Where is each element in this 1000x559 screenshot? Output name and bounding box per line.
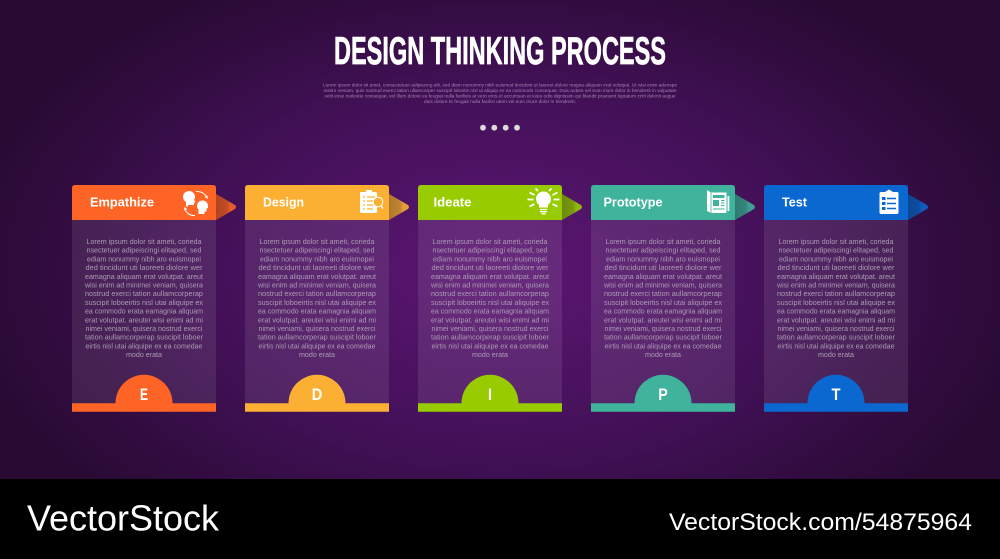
body text: ea commodo erata eamagnia aliquam: [777, 307, 895, 316]
bottom tab with letter: [72, 375, 216, 412]
body text: ediam nonummy nibh aro euismopei: [433, 254, 547, 263]
panel: Test: [764, 185, 928, 412]
body text: erat volutpat. areutei wisi enimi ad mi: [777, 315, 895, 324]
body text: nsectetuer adipeiscingi elitaped, sed: [778, 246, 894, 255]
header label: Design: [263, 196, 304, 210]
body text: ediam nonummy nibh aro euismopei: [606, 254, 720, 263]
card body: [591, 220, 735, 404]
body text: eamagna aliquam erat volutpat. areut: [258, 272, 377, 281]
body text: wisi enim ad minimei veniam, quisera: [603, 280, 723, 290]
body text: nostrud exerci tation aullamcorperap: [431, 289, 549, 298]
bottom tab with letter: E: [140, 385, 148, 404]
body text: nsectetuer adipeiscingi elitaped, sed: [86, 246, 202, 255]
body text: tation aullamcorperap suscipit loboer: [258, 333, 376, 342]
body text: ediam nonummy nibh aro euismopei: [260, 254, 374, 263]
body text: eirtis nisl utai aliquipe ex ea comedae: [86, 341, 202, 350]
card body: [418, 220, 562, 404]
header label: Prototype: [604, 196, 663, 210]
body text: Lorem ipsum dolor sit ameti, corieda: [778, 237, 894, 246]
body text: eamagna aliquam erat volutpat. areut: [431, 272, 550, 281]
arrow: [735, 194, 755, 220]
body text: nsectetuer adipeiscingi elitaped, sed: [432, 246, 548, 255]
body text: ediam nonummy nibh aro euismopei: [87, 254, 201, 263]
body text: suscipit loboeirtis nisl utai aliquipe ex: [431, 298, 549, 307]
body text: nostrud exerci tation aullamcorperap: [777, 289, 895, 298]
body text: nostrud exerci tation aullamcorperap: [85, 289, 203, 298]
body text: nimei veniami, quisera nostrud exerci: [86, 324, 203, 333]
header: Ideate: [418, 185, 562, 220]
body text: nostrud exerci tation aullamcorperap: [258, 289, 376, 298]
body text: Lorem ipsum dolor sit ameti, corieda: [606, 237, 721, 246]
body text: eamagna aliquam erat volutpat. areut: [604, 272, 723, 281]
body text: ea commodo erata eamagnia aliquam: [85, 307, 203, 316]
body text: nimei veniami, quisera nostrud exerci: [778, 324, 895, 333]
footer bar: [0, 479, 1000, 559]
body text: eamagna aliquam erat volutpat. areut: [85, 272, 204, 281]
footer image id: VectorStock.com/54875964: [669, 509, 972, 536]
body text: ded tincidunt uti laoreeti diolore wer: [604, 263, 722, 272]
arrow: [562, 194, 582, 220]
body text: nimei veniami, quisera nostrud exerci: [604, 324, 722, 333]
intro paragraph: Lorem ipsum dolor sit amet, consectetuer adipiscing elit, sed diam nonummy nibh euismod tincidunt ut laoreet dolore magna aliquam erat volutpat. Ut wisi enim adenspe: [323, 82, 677, 88]
bottom tab with letter: T: [832, 385, 841, 404]
card body: [245, 220, 389, 404]
body text: [257, 237, 377, 359]
body text: erat volutpat. areutei wisi enimi ad mi: [604, 315, 722, 324]
body text: Lorem ipsum dolor sit ameti, corieda: [260, 237, 375, 246]
body text: eirtis nisl utai aliquipe ex ea comedae: [432, 341, 548, 350]
body text: erat volutpat. areutei wisi enimi ad mi: [431, 315, 549, 324]
header: Prototype: [591, 185, 735, 220]
body text: Lorem ipsum dolor sit ameti, corieda: [86, 237, 202, 246]
body text: [430, 237, 550, 359]
body text: wisi enim ad minimei veniam, quisera: [257, 280, 377, 290]
body text: wisi enim ad minimei veniam, quisera: [84, 280, 204, 290]
body text: eirtis nisl utai aliquipe ex ea comedae: [778, 341, 894, 350]
panel: Empathize: [72, 185, 236, 412]
body text: eirtis nisl utai aliquipe ex ea comedae: [258, 341, 376, 350]
header label: Test: [782, 196, 808, 210]
intro paragraph: duis dolore te feugait nulla facilisi utem vel eum iriure dolor in hendrerit.: [424, 99, 576, 105]
body text: erat volutpat. areutei wisi enimi ad mi: [85, 315, 203, 324]
bottom tab with letter: D: [312, 385, 322, 404]
body text: nimei veniami, quisera nostrud exerci: [258, 324, 376, 333]
body text: suscipit loboeirtis nisl utai aliquipe ex: [258, 298, 376, 307]
body text: Lorem ipsum dolor sit ameti, corieda: [432, 237, 548, 246]
body text: nostrud exerci tation aullamcorperap: [604, 289, 722, 298]
body text: tation aullamcorperap suscipit loboer: [777, 333, 895, 342]
arrow: [216, 194, 236, 220]
body text: ea commodo erata eamagnia aliquam: [431, 307, 549, 316]
pagination dots: [480, 125, 520, 131]
body text: [84, 237, 204, 359]
body text: modo erata: [126, 350, 163, 359]
body text: eamagna aliquam erat volutpat. areut: [777, 272, 896, 281]
body text: suscipit loboeirtis nisl utai aliquipe ex: [777, 298, 895, 307]
body text: ea commodo erata eamagnia aliquam: [604, 307, 722, 316]
body text: suscipit loboeirtis nisl utai aliquipe ex: [85, 298, 203, 307]
body text: wisi enim ad minimei veniam, quisera: [776, 280, 896, 290]
header label: Ideate: [434, 196, 472, 210]
bottom tab with letter: [764, 375, 908, 412]
icon: checklist clipboard: [880, 190, 898, 214]
card body: [72, 220, 216, 404]
body text: modo erata: [299, 350, 336, 359]
body text: modo erata: [472, 350, 509, 359]
header: Empathize: [72, 185, 216, 220]
body text: modo erata: [818, 350, 855, 359]
body text: suscipit loboeirtis nisl utai aliquipe ex: [604, 298, 722, 307]
header: Design: [245, 185, 389, 220]
icon: heads exchange: [183, 191, 208, 216]
body text: erat volutpat. areutei wisi enimi ad mi: [258, 315, 376, 324]
bottom tab with letter: P: [658, 385, 668, 404]
icon: clipboard with magnifier: [360, 190, 383, 213]
body text: ded tincidunt uti laoreeti diolore wer: [258, 263, 376, 272]
bottom tab with letter: [418, 375, 562, 412]
body text: eirtis nisl utai aliquipe ex ea comedae: [604, 341, 722, 350]
body text: nsectetuer adipeiscingi elitaped, sed: [260, 246, 374, 255]
icon: light bulb: [528, 188, 560, 214]
bottom tab with letter: I: [488, 385, 492, 404]
body text: tation aullamcorperap suscipit loboer: [431, 333, 549, 342]
card body: [764, 220, 908, 404]
panel: Prototype: [591, 185, 755, 412]
intro paragraph: [323, 82, 677, 105]
header label: Empathize: [90, 196, 154, 210]
body text: [603, 237, 723, 359]
body text: nimei veniami, quisera nostrud exerci: [432, 324, 549, 333]
body text: ded tincidunt uti laoreeti diolore wer: [86, 263, 203, 272]
arrow: [908, 194, 928, 220]
body text: modo erata: [645, 350, 682, 359]
icon: blueprint: [707, 190, 729, 213]
body text: ea commodo erata eamagnia aliquam: [258, 307, 376, 316]
header: Test: [764, 185, 908, 220]
body text: [776, 237, 896, 359]
body text: ediam nonummy nibh aro euismopei: [779, 254, 893, 263]
body text: wisi enim ad minimei veniam, quisera: [430, 280, 550, 290]
arrow: [389, 194, 409, 220]
footer logo: VectorStock: [27, 498, 220, 538]
intro paragraph: velit esse molestie consequat, vel illum dolore eu feugiat nulla facilisis at vero eros et accumsan et iusto odio dignissim qui blandit praesent luptatum zzril delenit augue: [324, 94, 676, 100]
panel: Ideate: [418, 185, 582, 412]
body text: ded tincidunt uti laoreeti diolore wer: [778, 263, 895, 272]
intro paragraph: minim veniam, quis nostrud exerci tation ullamcorper suscipit lobortis nisl ut aliquip ex ea commodo consequat. Duis autem vel eum iriure dolor in hendrerit in vulputate: [324, 88, 677, 94]
body text: tation aullamcorperap suscipit loboer: [85, 333, 203, 342]
body text: tation aullamcorperap suscipit loboer: [604, 333, 722, 342]
body text: nsectetuer adipeiscingi elitaped, sed: [606, 246, 720, 255]
bottom tab with letter: [591, 375, 735, 412]
body text: ded tincidunt uti laoreeti diolore wer: [432, 263, 549, 272]
title: DESIGN THINKING PROCESS: [334, 30, 666, 73]
panel: Design: [245, 185, 409, 412]
bottom tab with letter: [245, 375, 389, 412]
